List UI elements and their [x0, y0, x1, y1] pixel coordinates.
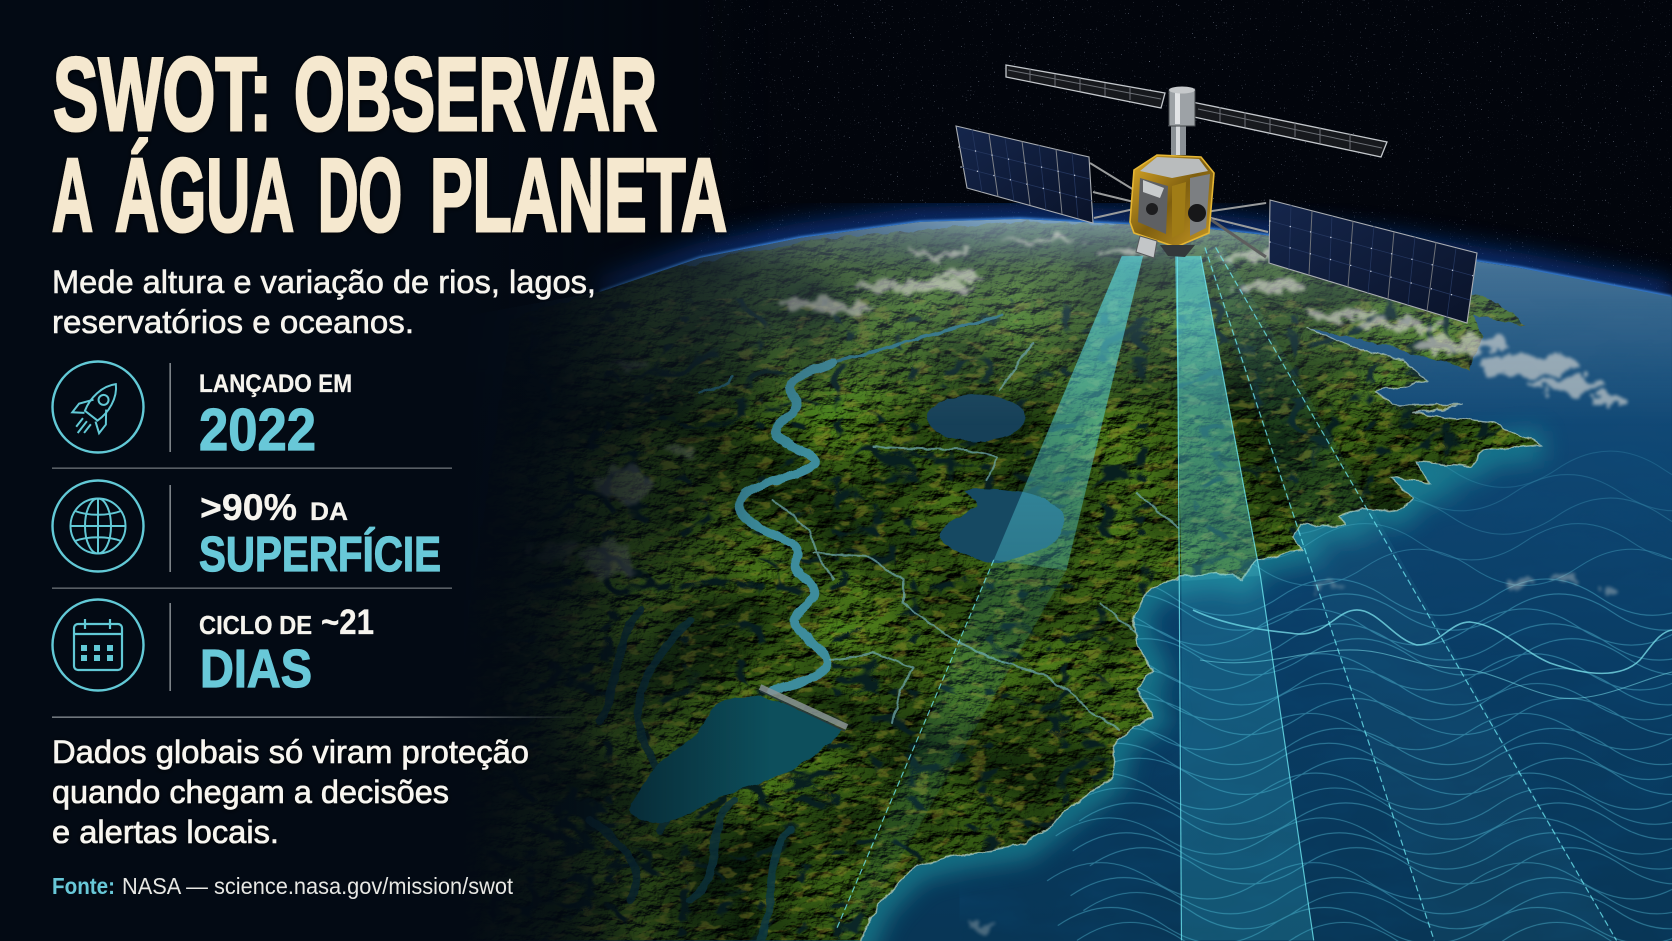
spacecraft body [1130, 155, 1214, 258]
lakes [927, 395, 1064, 563]
stat: launched [52, 362, 352, 463]
icon: rocket [52, 362, 144, 452]
land terrain [510, 220, 1541, 940]
label: >90% da [200, 487, 348, 528]
value: 2022: 2022 [199, 397, 316, 463]
label: ciclo de ~21 [199, 603, 374, 642]
closing message [52, 734, 529, 850]
source line: Fonte: [52, 873, 115, 899]
atmosphere glow along the horizon [600, 219, 1672, 297]
stat: cycle [52, 600, 374, 699]
label: >90% da: DA [310, 498, 348, 526]
antenna boom [1006, 65, 1387, 157]
subtitle: reservatórios e oceanos. [52, 304, 414, 340]
closing message: e alertas locais. [52, 814, 279, 850]
divider [170, 363, 171, 452]
rule [52, 468, 452, 469]
coast foam [853, 327, 1543, 941]
radar swath beams [837, 247, 1617, 940]
divider [170, 603, 171, 691]
icon: calendar [52, 600, 144, 690]
subtitle: Mede altura e variação de rios, lagos, [52, 264, 596, 300]
value: superfície: SUPERFÍCIE [199, 528, 441, 582]
title line 1: OBSERVAR [294, 37, 657, 153]
title line 2: PLANETA [430, 138, 727, 254]
label: lançado em: LANÇADO EM [199, 370, 352, 398]
shallow coastal water [853, 445, 1543, 941]
label: >90% da: >90% [200, 487, 297, 528]
icon: globe [52, 480, 144, 572]
clouds [531, 238, 1631, 930]
earth map [405, 213, 1672, 941]
struts [1090, 163, 1268, 257]
title line 1 [53, 37, 657, 153]
satellite [956, 65, 1477, 323]
title [52, 37, 727, 254]
dam [760, 687, 847, 731]
closing message: quando chegam a decisões [52, 774, 449, 810]
ocean texture [960, 299, 1672, 940]
left solar panel [956, 126, 1093, 223]
sensor module [1136, 236, 1157, 258]
reservoir [629, 696, 843, 824]
bright wave crests [1193, 610, 1672, 698]
divider [170, 485, 171, 572]
label: ciclo de ~21: CICLO DE [199, 610, 312, 640]
title line 2: ÁGUA [115, 138, 294, 254]
title line 1: SWOT: [53, 37, 272, 153]
title line 2: A [52, 138, 93, 254]
atmospheric haze over land [427, 213, 1672, 437]
upper-left dark fade over the limb [440, 200, 1140, 600]
source line: NASA — science.nasa.gov/mission/swot [122, 873, 514, 899]
stat: coverage [52, 480, 441, 582]
rule [52, 588, 452, 589]
ocean [427, 213, 1672, 941]
value: dias: DIAS [200, 639, 312, 699]
ocean wave contour lines [1043, 451, 1672, 941]
title line 2 [52, 138, 727, 254]
starfield [700, 0, 1672, 290]
title line 2: DO [318, 138, 402, 254]
label: ciclo de ~21: ~21 [321, 603, 374, 642]
right solar panel [1269, 200, 1477, 323]
rule [52, 716, 580, 718]
left dark fade panel [0, 0, 900, 941]
river and channels [590, 315, 1177, 940]
subtitle [52, 264, 596, 340]
mast [1169, 86, 1195, 155]
closing message: Dados globais só viram proteção [52, 734, 529, 770]
